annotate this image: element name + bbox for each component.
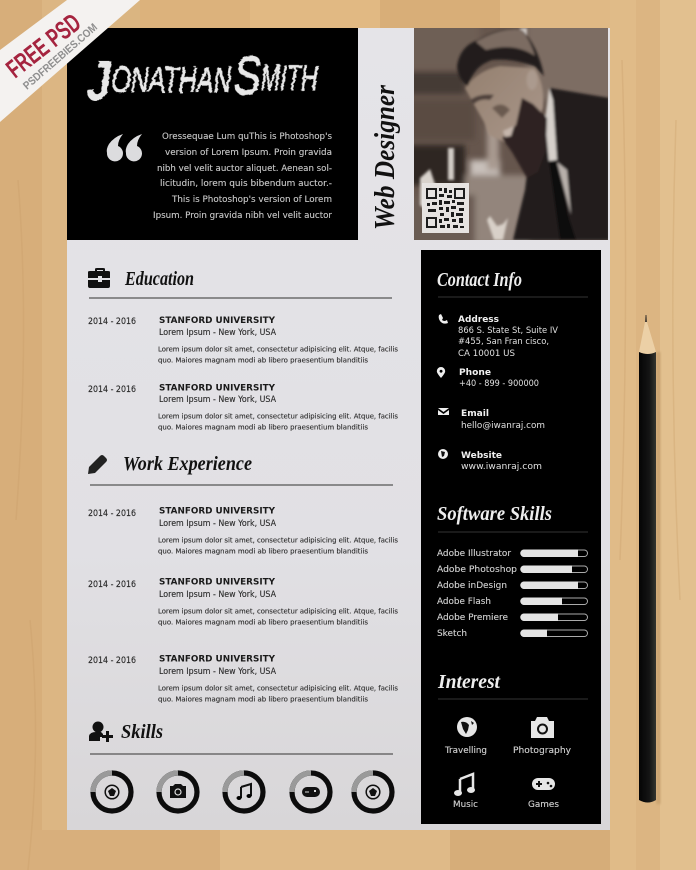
entry: STANFORD UNIVERSITY <box>159 654 275 664</box>
name: MITH <box>258 57 321 98</box>
skill bar: flash <box>437 597 588 607</box>
skill bar: illustrator: Adobe Illustrator <box>437 549 511 559</box>
entry: 2014 - 2016 <box>88 580 136 590</box>
interest: music <box>453 774 478 810</box>
free psd corner banner <box>0 0 140 122</box>
job title: Web Designer <box>370 84 401 230</box>
section: education <box>88 268 398 432</box>
entry: 2014 - 2016 <box>88 656 136 666</box>
entry <box>88 315 398 364</box>
skill donut: camera <box>159 773 197 811</box>
skill bar: premiere <box>437 613 588 623</box>
contact: address: Address <box>458 314 500 325</box>
heading: contact info: Contact Info <box>437 269 522 291</box>
entry: 2014 - 2016 <box>88 509 136 519</box>
heading: Skills <box>121 721 163 743</box>
name: S <box>230 46 266 106</box>
entry: STANFORD UNIVERSITY <box>159 506 275 516</box>
name: ONATHAN <box>109 59 235 100</box>
skill donut: football <box>354 773 392 811</box>
skill bar: photoshop <box>437 565 588 575</box>
contact: address <box>439 314 558 359</box>
quote text <box>153 132 332 221</box>
entry: Lorem Ipsum - New York, USA <box>159 518 276 528</box>
contact: email: hello@iwanraj.com <box>461 421 545 431</box>
entry: Lorem ipsum dolor sit amet, consectetur adipisicing elit. Atque, facilis <box>158 684 398 692</box>
entry <box>88 576 398 626</box>
icon: map pin <box>437 367 445 378</box>
skill donut: games <box>292 773 330 811</box>
quote text: licitudin, lorem quis bibendum auctor.- <box>160 179 332 189</box>
heading: software skills: Software Skills <box>437 503 552 525</box>
contact: address: CA 10001 US <box>458 349 515 359</box>
icon: gamepad <box>532 778 555 790</box>
section: work experience <box>88 453 398 704</box>
icon: add user <box>89 722 113 742</box>
entry: Lorem ipsum dolor sit amet, consectetur adipisicing elit. Atque, facilis <box>158 412 398 420</box>
icon: quote marks <box>107 134 142 161</box>
header black panel <box>67 28 358 240</box>
icon: briefcase <box>88 268 110 288</box>
entry <box>88 382 398 432</box>
face <box>465 66 543 150</box>
heading: interest: Interest <box>437 671 501 693</box>
contact: email <box>438 408 545 431</box>
entry: Lorem ipsum dolor sit amet, consectetur adipisicing elit. Atque, facilis <box>158 344 398 354</box>
entry: Lorem Ipsum - New York, USA <box>159 589 276 599</box>
contact: email: Email <box>461 408 489 419</box>
skill bar: photoshop: Adobe Photoshop <box>437 565 517 575</box>
entry: STANFORD UNIVERSITY <box>159 576 275 588</box>
contact: website <box>438 449 542 472</box>
contact: phone <box>437 367 539 389</box>
contact: address: #455, San Fran cisco, <box>458 337 549 347</box>
skill bar: indesign: Adobe inDesign <box>437 581 507 591</box>
pencil <box>639 315 661 804</box>
skill bar: flash: Adobe Flash <box>437 597 491 607</box>
resume paper <box>67 20 617 830</box>
beard <box>502 98 547 178</box>
icon: camera <box>531 717 554 738</box>
interest: games <box>528 778 559 810</box>
entry: Lorem Ipsum - New York, USA <box>159 394 276 404</box>
photo <box>414 28 608 240</box>
entry: quo. Maiores magnam modi ab libero praesentium blanditiis <box>158 422 368 432</box>
skill bar: premiere: Adobe Premiere <box>437 613 508 623</box>
entry: quo. Maiores magnam modi ab libero praesentium blanditiis <box>158 356 368 364</box>
skill bar: illustrator <box>437 549 588 559</box>
entry <box>88 654 398 704</box>
icon: envelope <box>438 408 449 415</box>
entry: Lorem ipsum dolor sit amet, consectetur adipisicing elit. Atque, facilis <box>158 536 398 544</box>
qr code <box>422 183 469 233</box>
entry <box>88 506 398 556</box>
entry: STANFORD UNIVERSITY <box>159 382 275 394</box>
quote text: version of Lorem Ipsum. Proin gravida <box>165 148 332 158</box>
quote text: nibh vel velit auctor aliquet. Aenean sol- <box>157 164 332 174</box>
entry: Lorem Ipsum - New York, USA <box>159 327 276 337</box>
entry: STANFORD UNIVERSITY <box>159 315 275 326</box>
section: skills <box>89 721 393 811</box>
interest: music: Music <box>453 800 478 810</box>
skill bar: indesign <box>437 581 588 591</box>
shirt <box>545 88 557 162</box>
entry: 2014 - 2016 <box>88 317 136 327</box>
quote text: Ipsum. Proin gravida nibh vel velit auctor <box>153 211 332 221</box>
hair <box>457 29 544 86</box>
heading: Education <box>124 268 194 290</box>
entry: Lorem ipsum dolor sit amet, consectetur adipisicing elit. Atque, facilis <box>158 606 398 616</box>
interest: photography <box>513 717 571 756</box>
icon: music note <box>460 774 473 793</box>
skill bar: sketch: Sketch <box>437 629 467 639</box>
entry: quo. Maiores magnam modi ab libero praesentium blanditiis <box>158 694 368 704</box>
entry: quo. Maiores magnam modi ab libero praesentium blanditiis <box>158 546 368 556</box>
entry: Lorem Ipsum - New York, USA <box>159 666 276 676</box>
quote text: Oressequae Lum quThis is Photoshop's <box>162 132 332 142</box>
contact: website: Website <box>461 450 502 461</box>
sidebar panel <box>421 250 601 824</box>
contact: phone: Phone <box>459 367 491 378</box>
suit <box>513 88 609 240</box>
skill donut: football <box>93 773 131 811</box>
contact: website: www.iwanraj.com <box>461 462 542 472</box>
icon: globe <box>438 449 448 459</box>
interest: travelling <box>444 717 487 756</box>
heading: Work Experience <box>123 453 252 475</box>
interest: photography: Photography <box>513 746 571 756</box>
name <box>83 46 323 112</box>
banner url: PSDFREEBIES.COM <box>21 22 100 92</box>
quote text: This is Photoshop's version of Lorem <box>171 195 332 205</box>
entry: 2014 - 2016 <box>88 385 136 395</box>
icon: globe <box>457 717 477 737</box>
entry: quo. Maiores magnam modi ab libero praesentium blanditiis <box>158 618 368 626</box>
contact: address: 866 S. State St, Suite IV <box>458 326 558 336</box>
contact: phone: +40 - 899 - 900000 <box>459 379 539 389</box>
skill donut: music <box>225 773 263 811</box>
icon: pencil <box>88 455 107 474</box>
name: J <box>83 49 116 112</box>
skill bar: sketch <box>437 629 588 639</box>
interest: games: Games <box>528 800 559 810</box>
icon: phone <box>439 314 448 324</box>
interest: travelling: Travelling <box>444 746 487 756</box>
